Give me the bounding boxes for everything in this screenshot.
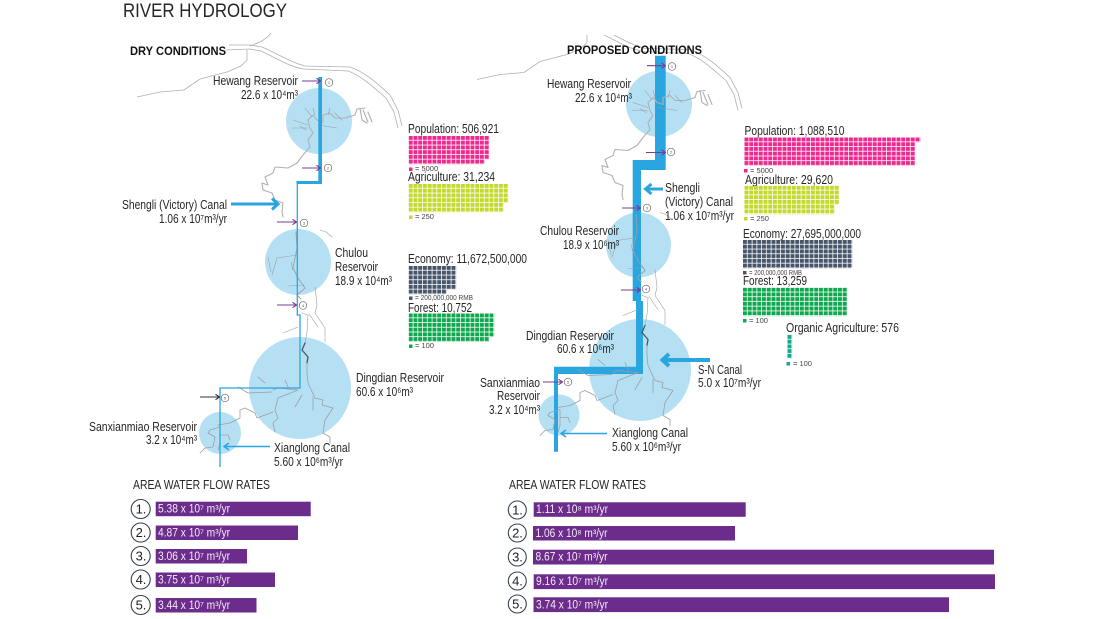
flow rate 5: 5.: [512, 596, 523, 612]
organic agriculture waffle: [786, 321, 899, 368]
forest waffle: [408, 301, 494, 350]
flow rate 3: 8.67 x 10⁷ m³/yr: [536, 552, 608, 564]
flow rate 5: [508, 595, 949, 613]
population waffle: [408, 122, 499, 173]
label: dingdian reservoir: 60.6 x 10⁶m³: [356, 385, 413, 399]
flow rate 5: 3.44 x 10⁷ m³/yr: [158, 600, 230, 612]
label: hewang reservoir: Hewang Reservoir: [213, 74, 298, 88]
station markers: [564, 63, 676, 386]
economy waffle: = 200,000,000 RMB: [415, 293, 473, 302]
flow rate 2: 2.: [136, 525, 146, 540]
reservoir circles: [199, 88, 352, 454]
economy waffle: Economy: 11,672,500,000: [408, 252, 527, 266]
population waffle: [744, 124, 920, 175]
station markers: 1: [671, 64, 674, 69]
label: shengli canal: Shengli: [665, 181, 700, 195]
label: dingdian reservoir: [526, 329, 614, 356]
population waffle: Population: 506,921: [408, 122, 499, 136]
label: hewang reservoir: [213, 74, 298, 102]
flow rate 1: 1.: [136, 502, 146, 516]
label: shengli canal: 1.06 x 10⁷m³/yr: [665, 209, 734, 223]
agriculture waffle: [408, 170, 508, 221]
canal arrow: shengli: [646, 184, 663, 194]
flow rate measurement arrows: [543, 66, 665, 382]
river network: [200, 108, 372, 453]
label: sanxianmiao reservoir: 3.2 x 10⁴m³: [146, 433, 197, 447]
population waffle: = 5000: [415, 164, 438, 173]
label: shengli canal: [665, 181, 734, 223]
economy waffle: [743, 227, 861, 277]
flow rate 4: 4.: [136, 572, 146, 587]
station markers: 4: [302, 303, 305, 308]
station markers: 2: [327, 166, 330, 170]
label: hewang reservoir: 22.6 x 10⁴m³: [241, 88, 298, 102]
panel: dry conditions statistics: [408, 122, 527, 350]
station markers: [221, 79, 333, 402]
panel: dry flow rates: [131, 478, 311, 614]
heading: AREA WATER FLOW RATES: [133, 478, 270, 492]
flow rate 3: [508, 548, 994, 566]
label: hewang reservoir: [547, 77, 632, 105]
flow rate 2: 1.06 x 10⁸ m³/yr: [536, 528, 608, 540]
flow rate 3: [131, 546, 247, 566]
economy waffle: = 200,000,000 RMB: [749, 268, 802, 277]
label: xianglong canal: Xianglong Canal: [612, 426, 688, 440]
flow rate 4: [131, 570, 275, 589]
label: shengli canal: 1.06 x 10⁷m³/yr: [159, 212, 227, 226]
economy waffle: Economy: 27,695,000,000: [743, 227, 861, 241]
station markers: 2: [670, 150, 673, 154]
flow rate 4: 4.: [512, 574, 523, 588]
label: sanxianmiao reservoir: Sanxianmiao Reservoir: [89, 420, 197, 434]
road lines: [137, 33, 402, 128]
label: chulou reservoir: 18.9 x 10⁴m³: [335, 274, 392, 288]
agriculture waffle: = 250: [750, 214, 769, 223]
station markers: 1: [328, 80, 331, 85]
agriculture waffle: [744, 173, 840, 223]
station markers: 5: [224, 396, 227, 400]
flow rate 2: [508, 524, 735, 542]
label: chulou reservoir: Chulou: [335, 246, 368, 260]
main flow channel: [554, 56, 666, 452]
label: sanxianmiao reservoir: [89, 420, 197, 447]
label: xianglong canal: [274, 441, 350, 469]
flow rate 1: [508, 501, 746, 519]
label: s-n canal: S-N Canal: [698, 363, 742, 377]
label: dingdian reservoir: Dingdian Reservoir: [356, 371, 444, 385]
heading: AREA WATER FLOW RATES: [509, 478, 646, 492]
forest waffle: = 100: [415, 341, 434, 350]
flow rate 3: 3.06 x 10⁷ m³/yr: [158, 551, 230, 563]
agriculture waffle: Agriculture: 29,620: [745, 173, 833, 187]
label: dingdian reservoir: 60.6 x 10⁶m³: [557, 342, 614, 356]
flow rate 5: [131, 596, 256, 614]
label: dingdian reservoir: [356, 371, 444, 399]
label: chulou reservoir: [335, 246, 392, 288]
river network: [540, 90, 712, 436]
reservoir circles: [538, 71, 692, 436]
panel: proposed flow rates: [508, 478, 995, 613]
canal arrow: xianglong: [561, 430, 607, 437]
agriculture waffle: = 250: [415, 212, 434, 221]
label: dingdian reservoir: Dingdian Reservoir: [526, 329, 614, 343]
canal arrow: xianglong: [224, 443, 270, 450]
station markers: 5: [567, 380, 570, 384]
flow rate 2: [131, 523, 298, 542]
flow rate 5: 5.: [136, 598, 146, 612]
agriculture waffle: Agriculture: 31,234: [408, 170, 495, 184]
flow rate 5: 3.74 x 10⁷ m³/yr: [536, 600, 608, 612]
flow rate 1: 1.: [512, 502, 523, 518]
panel: proposed conditions statistics: [743, 124, 920, 368]
label: hewang reservoir: Hewang Reservoir: [547, 77, 631, 91]
flow rate 4: [508, 572, 995, 590]
economy waffle: [408, 252, 527, 302]
flow rate 1: 5.38 x 10⁷ m³/yr: [158, 504, 230, 516]
forest waffle: [743, 274, 848, 325]
road lines: [477, 35, 742, 110]
forest waffle: Forest: 13,259: [743, 274, 807, 288]
flow rate 4: 3.75 x 10⁷ m³/yr: [158, 574, 230, 586]
label: sanxianmiao reservoir: 3.2 x 10⁴m³: [489, 403, 540, 417]
flow rate 2: 4.87 x 10⁷ m³/yr: [158, 528, 230, 540]
label: hewang reservoir: 22.6 x 10⁴m³: [575, 91, 632, 105]
label: sanxianmiao reservoir: Reservoir: [497, 389, 540, 403]
panel: proposed conditions map: [477, 16, 761, 454]
flow rate 3: 3.: [512, 550, 523, 564]
label: xianglong canal: 5.60 x 10⁶m³/yr: [612, 440, 681, 454]
flow rate 4: 9.16 x 10⁷ m³/yr: [536, 576, 608, 588]
forest waffle: Forest: 10,752: [408, 301, 472, 315]
label: s-n canal: [698, 363, 761, 390]
canal arrow: s-n: [662, 354, 710, 366]
label: sanxianmiao reservoir: Sanxianmiao: [480, 376, 540, 390]
organic agriculture waffle: = 100: [793, 359, 812, 368]
flow rate 1: [131, 500, 311, 518]
heading: dry conditions: DRY CONDITIONS: [130, 44, 226, 58]
flow rate measurement arrows: [200, 81, 320, 397]
label: xianglong canal: Xianglong Canal: [274, 441, 350, 455]
label: shengli canal: (Victory) Canal: [665, 195, 733, 209]
label: sanxianmiao reservoir: [480, 376, 540, 417]
label: shengli canal: Shengli (Victory) Canal: [122, 198, 227, 212]
flow rate 2: 2.: [512, 526, 523, 540]
station markers: 3: [303, 220, 306, 226]
main flow line: [220, 77, 322, 467]
label: chulou reservoir: 18.9 x 10⁶m³: [563, 238, 619, 252]
heading: proposed conditions: PROPOSED CONDITIONS: [567, 43, 702, 57]
label: shengli canal: [122, 198, 227, 226]
panel: dry conditions map: [89, 33, 444, 469]
population waffle: = 5000: [750, 166, 773, 175]
flow rate 3: 3.: [136, 548, 146, 564]
label: xianglong canal: [612, 426, 688, 454]
label: chulou reservoir: [540, 224, 619, 252]
station markers: 4: [645, 286, 648, 292]
population waffle: Population: 1,088,510: [744, 124, 845, 138]
station markers: 3: [646, 206, 649, 210]
label: chulou reservoir: Reservoir: [335, 260, 378, 274]
label: s-n canal: 5.0 x 10⁷m³/yr: [698, 376, 761, 390]
organic agriculture waffle: Organic Agriculture: 576: [786, 321, 899, 335]
label: xianglong canal: 5.60 x 10⁶m³/yr: [274, 455, 343, 469]
canal arrow: shengli: [231, 198, 278, 210]
title: RIVER HYDROLOGY: [123, 0, 287, 22]
flow rate 1: 1.11 x 10⁸ m³/yr: [536, 504, 608, 516]
forest waffle: = 100: [749, 316, 768, 325]
label: chulou reservoir: Chulou Reservoir: [540, 224, 619, 238]
